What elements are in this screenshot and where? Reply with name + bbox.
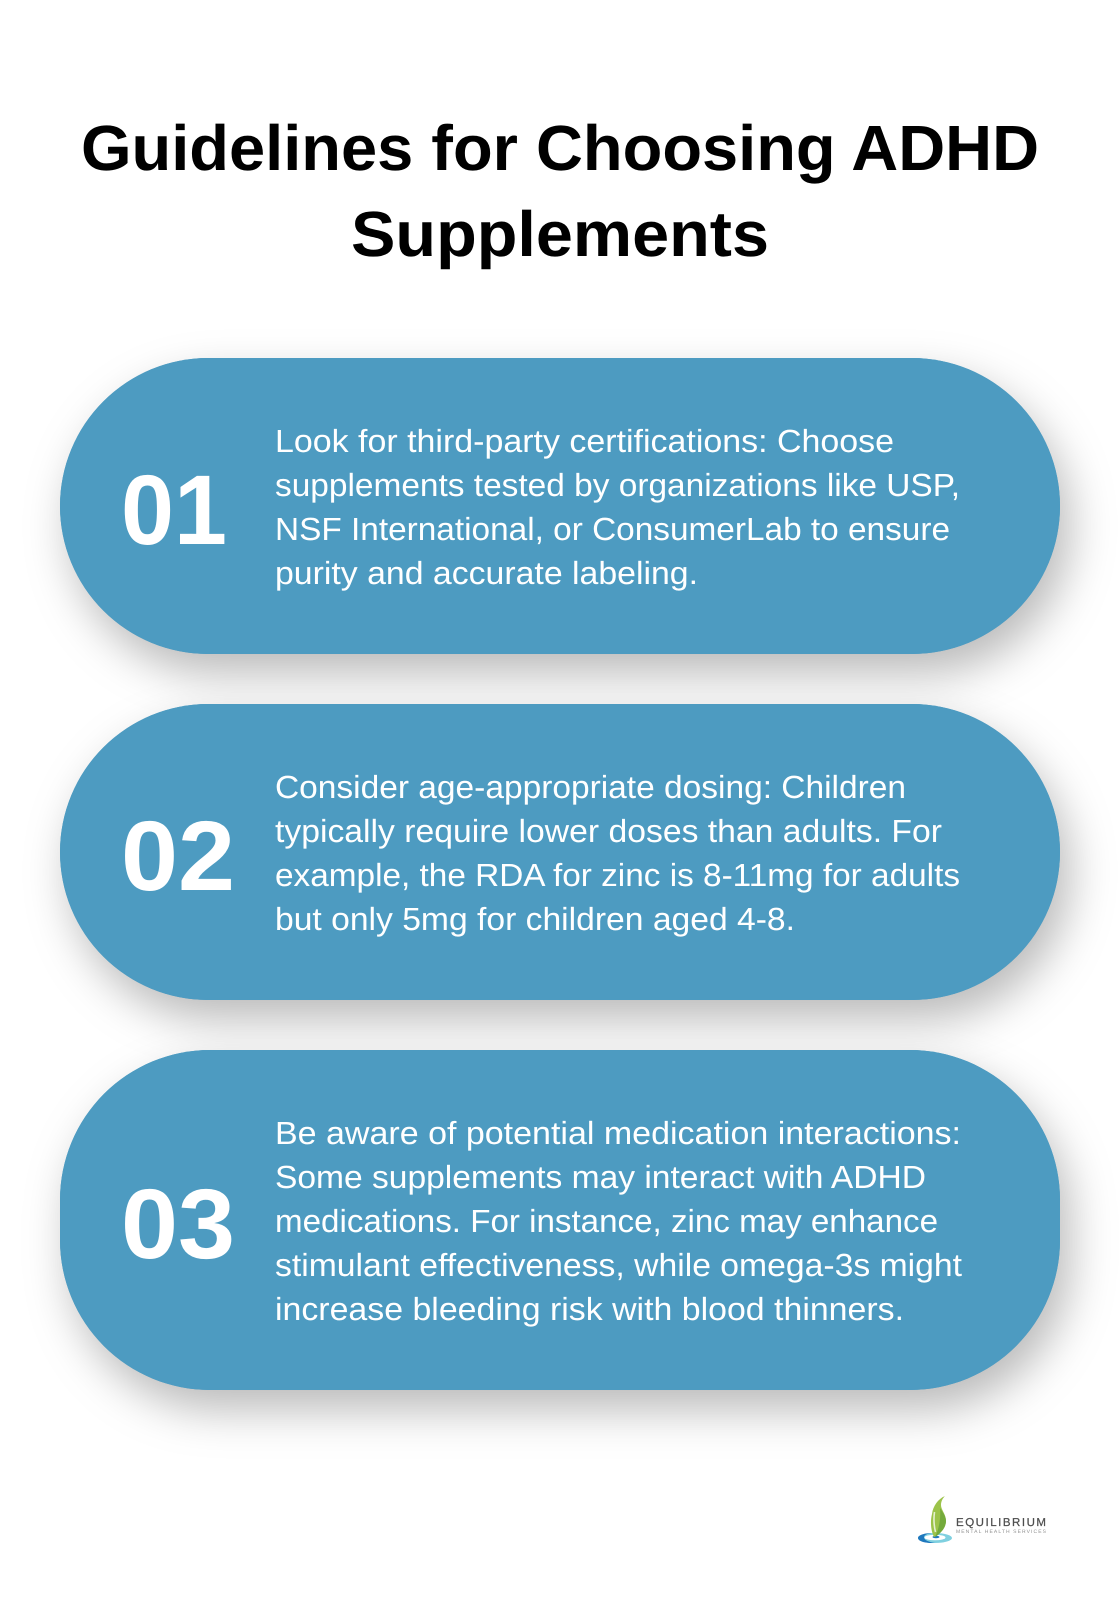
- number 01: 01: [121, 454, 227, 565]
- logo wordmark: MENTAL HEALTH SERVICES: [956, 1529, 1047, 1535]
- text block 01: [275, 423, 960, 591]
- text block 03: Some supplements may interact with ADHD: [275, 1159, 926, 1195]
- text block 02: Consider age-appropriate dosing: Children: [275, 769, 906, 805]
- number 03: 03: [121, 1168, 235, 1279]
- text block 03: increase bleeding risk with blood thinners.: [275, 1291, 904, 1327]
- text block 03: [275, 1115, 962, 1327]
- text block 01: Look for third-party certifications: Choose: [275, 423, 894, 459]
- panel: guideline 02: [60, 704, 1060, 1000]
- number 02: 02: [121, 800, 235, 911]
- icon: water ripple: [918, 1533, 952, 1543]
- text block 02: but only 5mg for children aged 4-8.: [275, 901, 795, 937]
- icon: green leaf flame: [931, 1496, 946, 1537]
- card background 03: [60, 1050, 1060, 1390]
- logo: Equilibrium Mental Health Services: [918, 1496, 1047, 1543]
- text block 02: typically require lower doses than adults. For: [275, 813, 942, 849]
- title: [81, 112, 1039, 270]
- text block 02: [275, 769, 960, 937]
- text block 03: medications. For instance, zinc may enhance: [275, 1203, 938, 1239]
- logo wordmark: EQUILIBRIUM: [956, 1517, 1046, 1529]
- panel: guideline 03: [60, 1050, 1060, 1390]
- title: Supplements: [351, 198, 769, 270]
- card background 01: [60, 358, 1060, 654]
- panel: guideline 01: [60, 358, 1060, 654]
- title: Guidelines for Choosing ADHD: [81, 112, 1039, 184]
- text block 01: supplements tested by organizations like USP,: [275, 467, 960, 503]
- text block 01: NSF International, or ConsumerLab to ensure: [275, 511, 950, 547]
- text block 01: purity and accurate labeling.: [275, 555, 698, 591]
- text block 03: stimulant effectiveness, while omega-3s might: [275, 1247, 962, 1283]
- card background 02: [60, 704, 1060, 1000]
- text block 02: example, the RDA for zinc is 8-11mg for adults: [275, 857, 960, 893]
- logo wordmark: [956, 1517, 1047, 1535]
- text block 03: Be aware of potential medication interactions:: [275, 1115, 961, 1151]
